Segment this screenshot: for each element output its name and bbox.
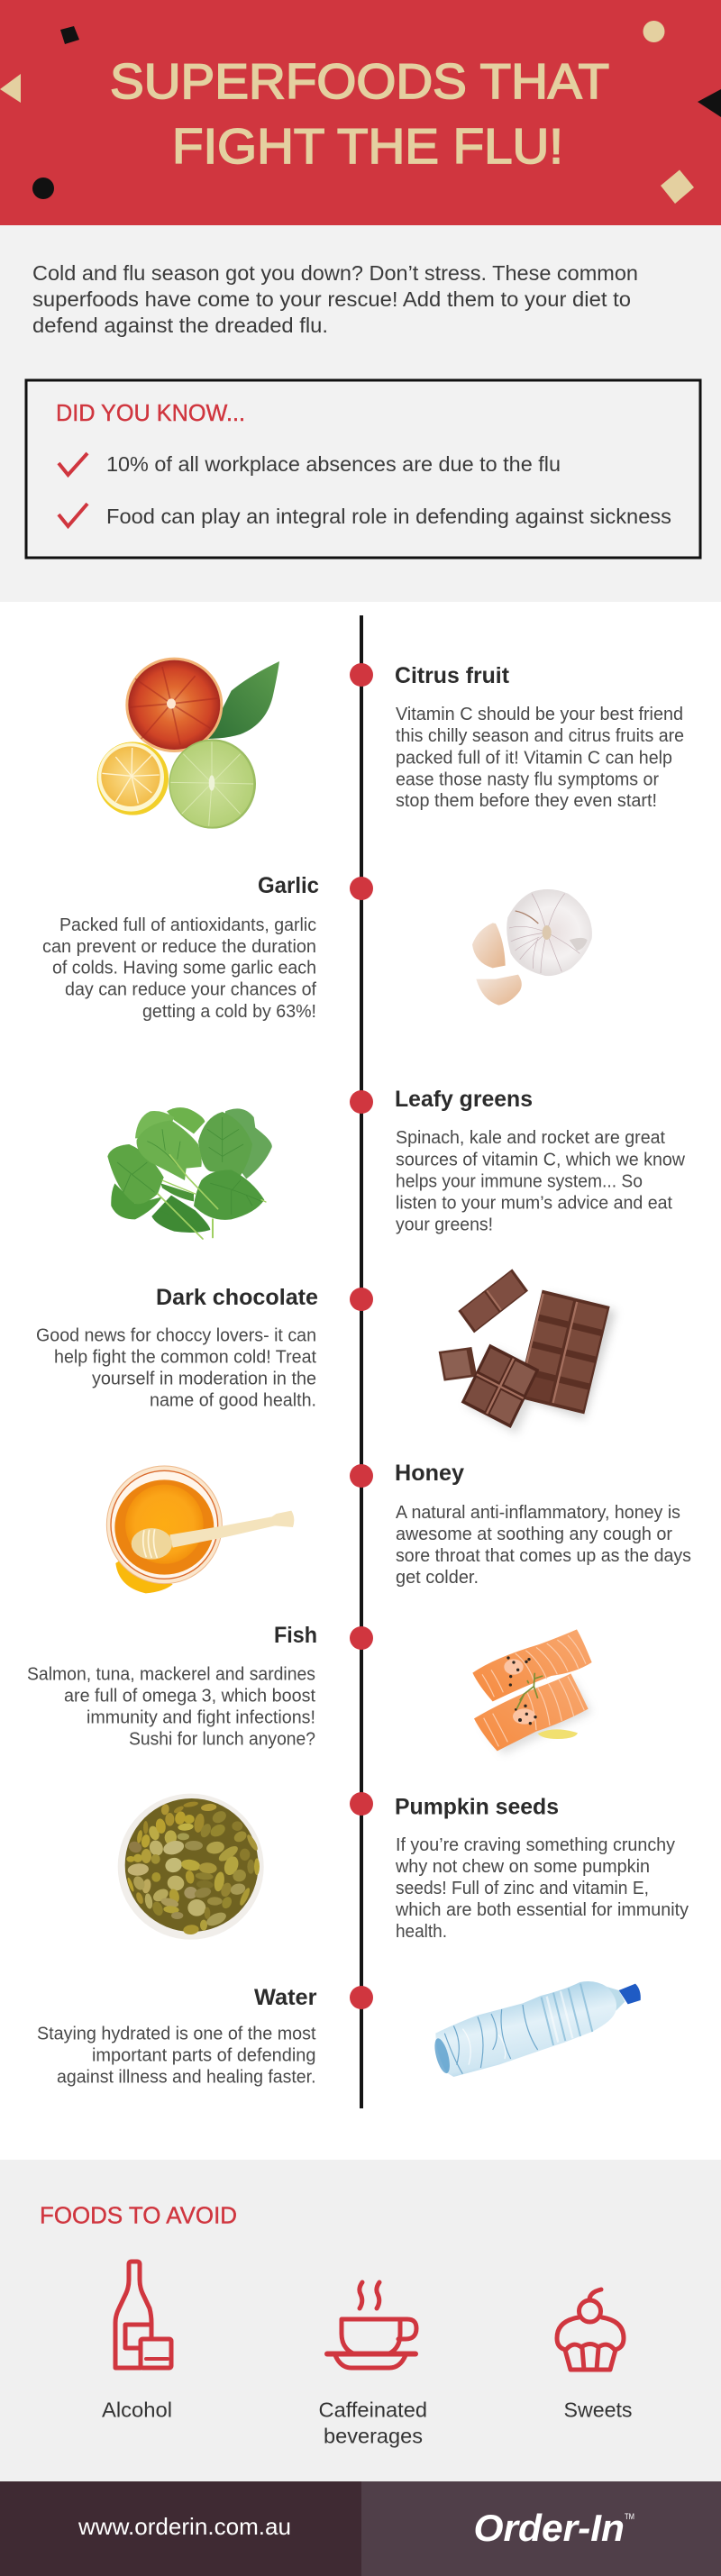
panel: citrus fruit	[97, 658, 684, 829]
panel: title banner	[0, 0, 721, 225]
text block	[396, 1128, 686, 1234]
image: bowl of pumpkin seeds	[118, 1794, 264, 1940]
panel: foods to avoid	[0, 2160, 721, 2481]
timeline dot	[350, 1090, 373, 1114]
icon: check mark 1	[59, 453, 87, 475]
panel: leafy greens	[107, 1087, 686, 1239]
website url: www.orderin.com.au	[78, 2513, 291, 2540]
heading: Fish	[274, 1623, 317, 1648]
callout heading: DID YOU KNOW...	[56, 399, 245, 426]
panel: water	[37, 1981, 641, 2087]
image: garlic	[472, 889, 592, 1006]
image: salmon	[472, 1629, 592, 1754]
text block	[27, 1665, 315, 1750]
text block: health.	[396, 1922, 447, 1942]
text block: Vitamin C should be your best friend	[396, 705, 683, 724]
image: citrus fruit	[97, 658, 279, 829]
text block: are full of omega 3, which boost	[64, 1687, 315, 1707]
heading: Citrus fruit	[395, 663, 510, 688]
timeline line	[360, 615, 363, 2108]
title: FIGHT THE FLU!	[172, 118, 563, 174]
text block: packed full of it! Vitamin C can help	[396, 748, 672, 768]
text block: Staying hydrated is one of the most	[37, 2024, 316, 2044]
text block: Sushi for lunch anyone?	[129, 1730, 315, 1750]
fact 1: 10% of all workplace absences are due to the flu	[106, 452, 561, 476]
text block: help fight the common cold! Treat	[54, 1348, 316, 1368]
intro text: Cold and flu season got you down? Don’t stress. These common	[32, 261, 638, 285]
intro text	[32, 261, 638, 337]
text block	[36, 1326, 316, 1411]
panel: fish	[27, 1623, 592, 1754]
logo: Order-In: TM	[625, 2512, 634, 2521]
logo: Order-In: Order-In	[474, 2507, 625, 2549]
text block: A natural anti-inflammatory, honey is	[396, 1503, 680, 1523]
text block	[37, 2024, 316, 2087]
intro text: defend against the dreaded flu.	[32, 314, 328, 337]
text block	[42, 915, 316, 1022]
text block: yourself in moderation in the	[92, 1370, 316, 1389]
image: water bottle	[432, 1981, 641, 2077]
intro text: superfoods have come to your rescue! Add them to your diet to	[32, 287, 631, 311]
text block: sore throat that comes up as the days	[396, 1546, 691, 1566]
image: chocolate	[439, 1269, 616, 1434]
timeline dot	[350, 1626, 373, 1650]
image: spinach	[107, 1107, 272, 1239]
text block: helps your immune system... So	[396, 1171, 643, 1191]
timeline dot	[350, 877, 373, 900]
text block: immunity and fight infections!	[87, 1708, 315, 1728]
text block: If you’re craving something crunchy	[396, 1835, 675, 1855]
icon: alcohol	[115, 2262, 171, 2368]
text block: against illness and healing faster.	[57, 2067, 315, 2087]
panel: garlic	[42, 873, 592, 1022]
title	[110, 53, 609, 174]
label: caffeinated beverages: beverages	[324, 2424, 423, 2447]
heading: FOODS TO AVOID	[40, 2202, 237, 2229]
text block: Good news for choccy lovers- it can	[36, 1326, 316, 1346]
heading: Garlic	[258, 873, 319, 898]
panel: pumpkin seeds	[118, 1792, 689, 1942]
timeline dot	[350, 1792, 373, 1816]
text block: Packed full of antioxidants, garlic	[59, 915, 316, 935]
heading: Water	[254, 1985, 317, 2010]
icon: coffee cup	[327, 2282, 416, 2368]
text block: sources of vitamin C, which we know	[396, 1150, 686, 1170]
heading: Honey	[395, 1461, 464, 1486]
text block: day can reduce your chances of	[65, 980, 316, 1000]
text block: of colds. Having some garlic each	[52, 959, 316, 979]
timeline dot	[350, 1464, 373, 1488]
heading: Dark chocolate	[156, 1285, 318, 1310]
image: honey jar	[106, 1466, 294, 1593]
icon: check mark 2	[59, 504, 87, 526]
panel: footer	[0, 2481, 721, 2576]
text block: this chilly season and citrus fruits are	[396, 726, 684, 746]
icon: cupcake	[557, 2289, 624, 2370]
label: alcohol: Alcohol	[102, 2399, 172, 2422]
text block: get colder.	[396, 1568, 479, 1588]
text block: listen to your mum’s advice and eat	[396, 1193, 672, 1213]
timeline dot	[350, 663, 373, 687]
callout: did you know	[26, 380, 700, 558]
text block: which are both essential for immunity	[395, 1900, 689, 1920]
heading: Leafy greens	[395, 1087, 533, 1112]
text block	[396, 1503, 691, 1588]
panel: dark chocolate	[36, 1269, 616, 1434]
text block	[395, 1835, 689, 1942]
text block: Spinach, kale and rocket are great	[396, 1128, 665, 1148]
panel: introduction	[0, 225, 721, 602]
timeline dot	[350, 1986, 373, 2009]
timeline dot	[350, 1288, 373, 1311]
fact 2: Food can play an integral role in defending against sickness	[106, 505, 671, 528]
title: SUPERFOODS THAT	[110, 53, 609, 109]
text block: your greens!	[396, 1215, 493, 1234]
text block: name of good health.	[150, 1391, 316, 1411]
panel: honey	[106, 1461, 691, 1593]
label: sweets: Sweets	[564, 2399, 633, 2422]
label: caffeinated beverages	[319, 2399, 427, 2447]
text block: seeds! Full of zinc and vitamin E,	[396, 1879, 649, 1898]
text block: getting a cold by 63%!	[142, 1002, 316, 1022]
decorative confetti shapes	[0, 21, 721, 204]
text block: stop them before they even start!	[396, 791, 657, 811]
text block: can prevent or reduce the duration	[42, 937, 316, 957]
text block: important parts of defending	[92, 2045, 315, 2065]
text block: Salmon, tuna, mackerel and sardines	[27, 1665, 315, 1685]
heading: Pumpkin seeds	[395, 1795, 559, 1820]
label: caffeinated beverages: Caffeinated	[319, 2399, 427, 2422]
text block: why not chew on some pumpkin	[395, 1857, 650, 1877]
text block: ease those nasty flu symptoms or	[396, 769, 659, 789]
text block	[396, 705, 684, 811]
text block: awesome at soothing any cough or	[396, 1525, 672, 1544]
